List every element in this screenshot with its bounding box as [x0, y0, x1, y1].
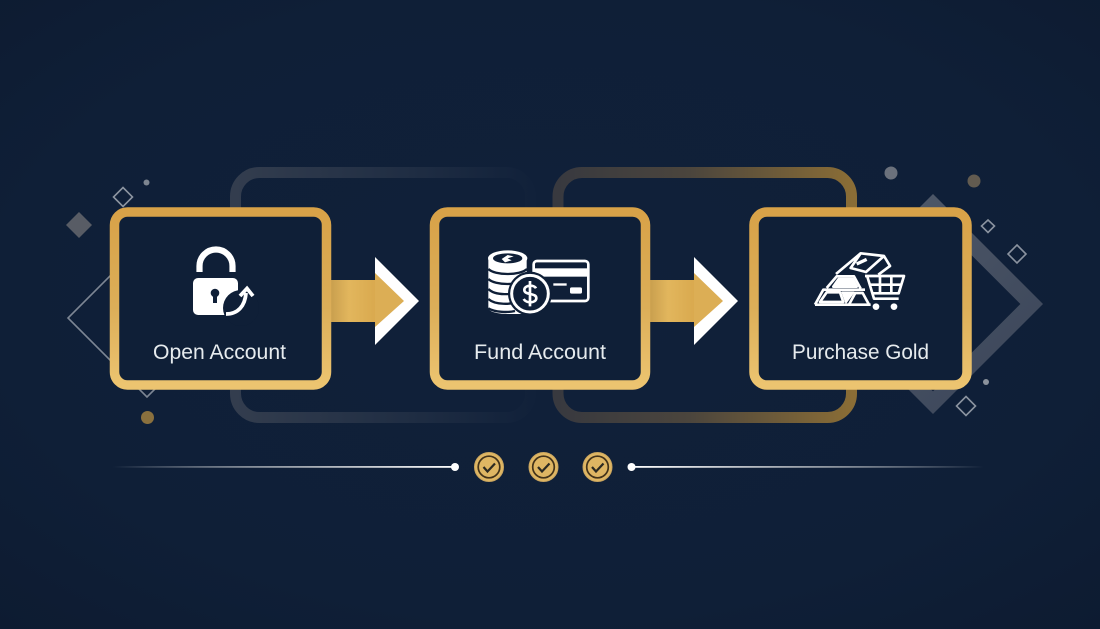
decorative outlined diamond, right 2 — [1008, 245, 1026, 263]
decorative dot, upper left — [144, 180, 150, 186]
panel: purchase gold — [754, 212, 967, 385]
panel: open account — [114, 212, 326, 385]
label: purchase gold: Purchase Gold — [792, 341, 929, 364]
arrow: open to fund — [331, 257, 419, 345]
decorative grey dot, upper right — [884, 166, 898, 180]
decorative gold dot, lower left — [141, 411, 154, 424]
decorative dot, lower right — [983, 379, 989, 385]
decorative outlined diamond, upper left — [114, 188, 132, 206]
faint background frame, left — [236, 172, 530, 418]
icon: gold bars and shopping cart — [815, 253, 904, 310]
timeline node, right — [628, 463, 636, 471]
arrow: fund to purchase — [650, 257, 738, 345]
decorative brown dot, upper right — [968, 174, 980, 188]
gold background frame, centre — [558, 172, 852, 418]
panel: fund account — [434, 212, 646, 385]
icon: open padlock with arrow — [193, 250, 259, 326]
check badge 1 — [474, 452, 504, 482]
card frame — [114, 212, 326, 385]
check badge 3 — [583, 452, 612, 482]
decorative outlined diamond, right 1 — [982, 220, 994, 232]
timeline line, left — [113, 466, 455, 468]
decorative outlined diamond, lower right — [956, 396, 976, 416]
card frame — [434, 212, 646, 385]
timeline node, left — [451, 463, 459, 471]
card frame — [754, 212, 967, 385]
timeline line, right — [632, 466, 984, 468]
decorative large outlined diamond, left — [68, 239, 226, 397]
large chevron diamond, right — [834, 205, 1032, 403]
check badge 2 — [529, 452, 558, 482]
label: fund account: Fund Account — [474, 341, 606, 364]
decorative filled diamond, left — [66, 212, 92, 238]
icon: coins and credit card — [488, 250, 588, 316]
label: open account: Open Account — [153, 341, 286, 364]
